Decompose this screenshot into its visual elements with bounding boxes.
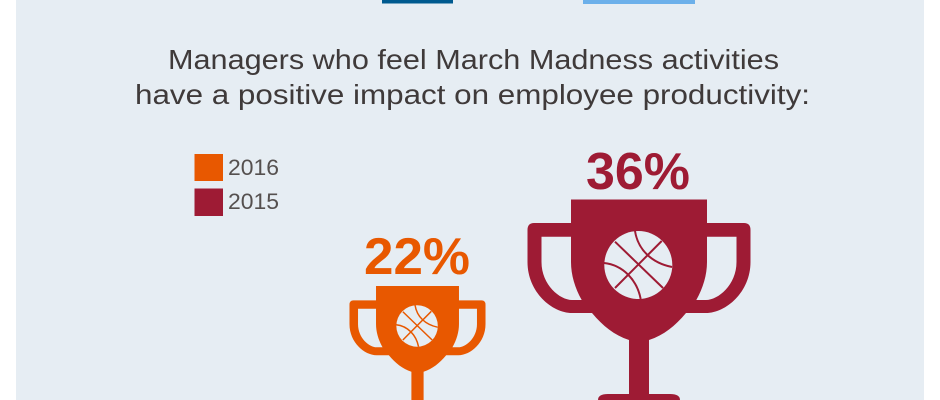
legend bar fragment: light blue bbox=[583, 0, 695, 4]
value: 22%: 22% bbox=[364, 228, 470, 286]
icon: orange trophy 2016 bbox=[349, 286, 486, 400]
legend bbox=[194, 154, 279, 216]
legend item: 2015: 2015 bbox=[228, 189, 279, 214]
legend bar fragment: dark blue bbox=[382, 0, 453, 4]
heading bbox=[135, 44, 810, 110]
legend item: 2016: 2016 bbox=[228, 155, 279, 180]
value: 36%: 36% bbox=[586, 143, 690, 201]
icon: maroon trophy 2015 bbox=[528, 200, 750, 400]
heading: Managers who feel March Madness activities bbox=[168, 44, 779, 75]
heading: have a positive impact on employee productivity: bbox=[135, 79, 810, 110]
